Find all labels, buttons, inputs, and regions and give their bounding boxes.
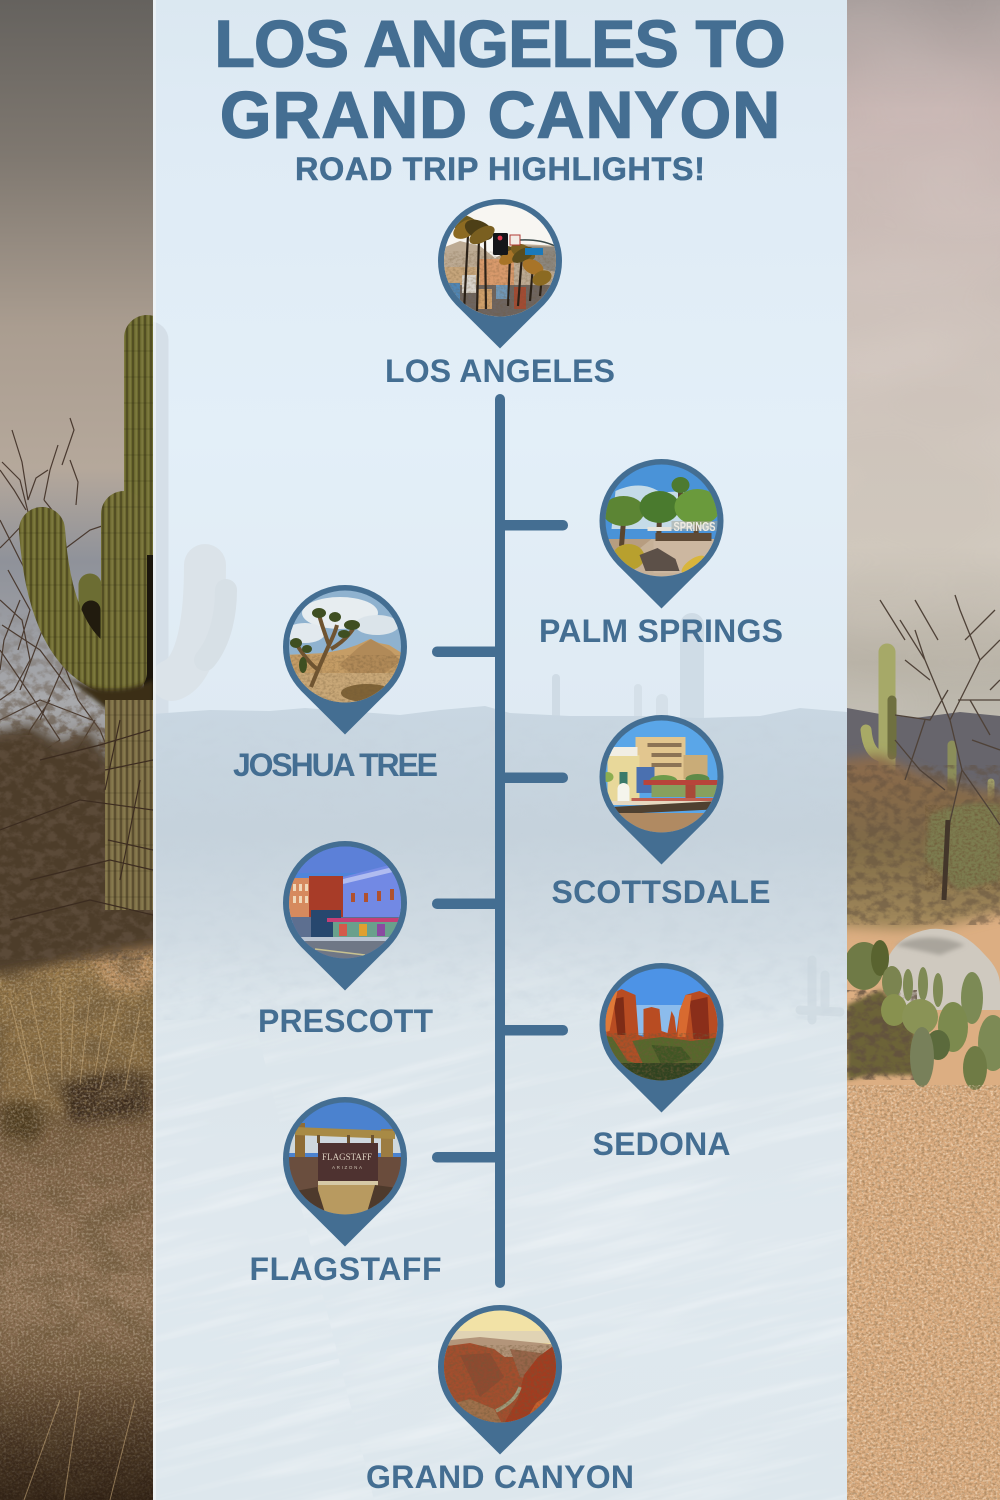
bare tree bbox=[880, 594, 1000, 826]
ghosted cactus behind panel bbox=[150, 340, 692, 745]
background photo: left desert strip with saguaro bbox=[0, 0, 153, 1500]
label: Sedona: SEDONA bbox=[592, 1126, 730, 1162]
label: Grand Canyon: GRAND CANYON bbox=[366, 1459, 634, 1495]
label: Palm Springs: PALM SPRINGS bbox=[539, 613, 783, 649]
saguaro cactus bbox=[42, 338, 158, 910]
pin: Joshua Tree bbox=[283, 585, 407, 734]
title: GRAND CANYON bbox=[220, 78, 780, 152]
desert brush bbox=[820, 755, 1000, 930]
photo: Joshua tree and rock pile bbox=[289, 590, 401, 702]
road streak texture bbox=[177, 1038, 847, 1500]
panel: translucent blue route panel bbox=[150, 0, 847, 1500]
photo: Flagstaff Arizona sign bbox=[289, 1102, 401, 1214]
label: Los Angeles: LOS ANGELES bbox=[385, 353, 615, 389]
bare desert branches bbox=[0, 418, 105, 747]
photo: palm-lined street bbox=[444, 204, 556, 316]
pin: Los Angeles bbox=[438, 199, 562, 348]
label: Joshua Tree: JOSHUA TREE bbox=[233, 747, 438, 783]
photo: red rock buttes bbox=[606, 968, 718, 1080]
branches over cactus trunk bbox=[0, 720, 153, 920]
pin: Sedona bbox=[600, 963, 724, 1112]
label: Flagstaff: FLAGSTAFF bbox=[250, 1251, 442, 1287]
photo: Flagstaff Arizona sign: ARIZONA bbox=[332, 1165, 362, 1170]
boulder bbox=[885, 929, 1000, 1010]
photo: palm trees and Palm Springs sign bbox=[606, 464, 718, 576]
pin: Scottsdale bbox=[600, 715, 724, 864]
right saguaro cacti bbox=[866, 652, 991, 800]
sand ground bbox=[847, 880, 1000, 1500]
label: Prescott: PRESCOTT bbox=[258, 1003, 433, 1039]
pin: Prescott bbox=[283, 841, 407, 990]
dry ground and grasses bbox=[0, 930, 153, 1500]
shrub below boulder bbox=[847, 990, 915, 1080]
prickly pear cactus bbox=[844, 940, 1000, 1090]
photo: palm trees and Palm Springs sign: SPRINGS bbox=[674, 519, 716, 534]
background photo: right desert strip with boulder and prickly pear bbox=[847, 0, 1000, 1500]
pin: Grand Canyon bbox=[438, 1305, 562, 1454]
photo: waterfront buildings and bridge bbox=[606, 720, 718, 832]
pin: Palm Springs bbox=[600, 459, 724, 608]
desert brush behind cactus bbox=[0, 717, 153, 983]
title: LOS ANGELES TO bbox=[214, 6, 786, 80]
photo: historic main street bbox=[289, 846, 401, 958]
subtitle: ROAD TRIP HIGHLIGHTS! bbox=[295, 151, 705, 187]
photo: Grand Canyon and river bend bbox=[444, 1310, 556, 1422]
green shrub bbox=[925, 804, 1000, 890]
label: Scottsdale: SCOTTSDALE bbox=[552, 874, 770, 910]
pin: Flagstaff bbox=[283, 1097, 407, 1246]
photo: Flagstaff Arizona sign: FLAGSTAFF bbox=[322, 1152, 372, 1162]
timeline: vertical route line with branches bbox=[432, 394, 568, 1288]
ghosted mountains and ground bbox=[153, 706, 847, 1500]
title bbox=[214, 6, 786, 152]
distant mountains bbox=[847, 708, 1000, 802]
